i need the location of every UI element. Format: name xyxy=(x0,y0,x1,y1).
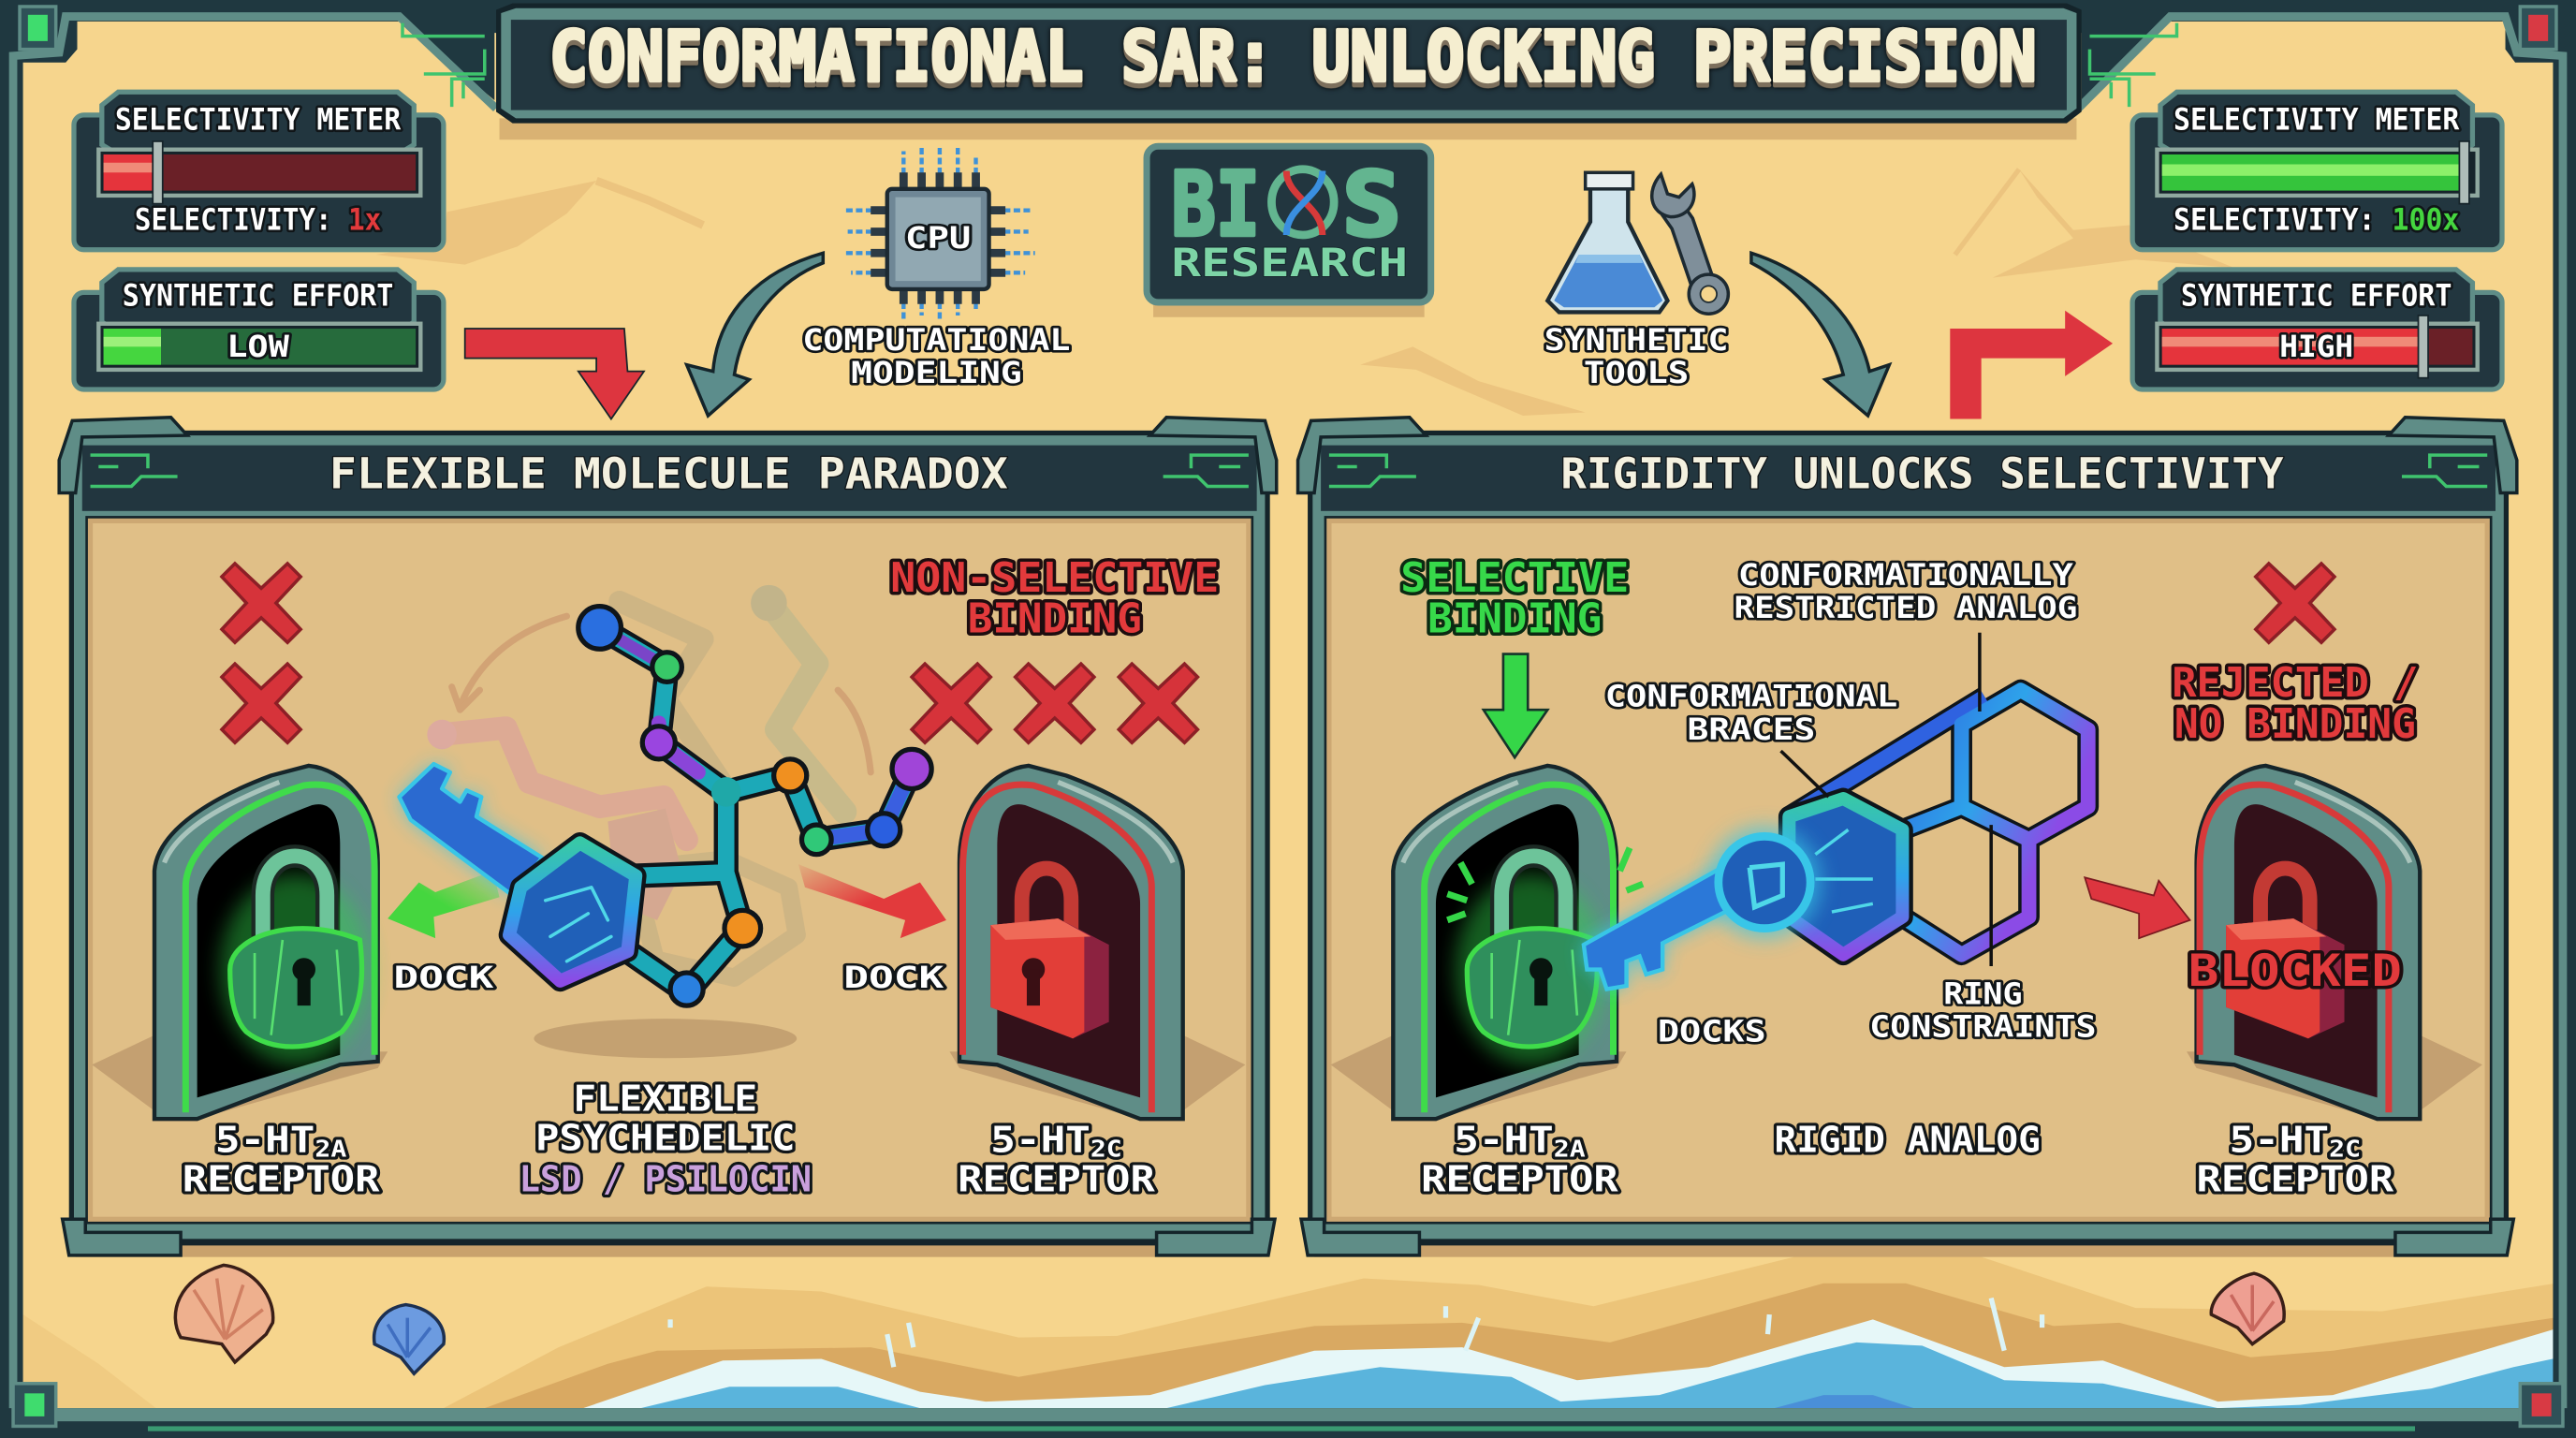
label: selective binding xyxy=(1400,554,1629,643)
panel heading: FLEXIBLE MOLECULE PARADOX xyxy=(329,448,1008,498)
label: 5-HT2C left: RECEPTOR xyxy=(958,1158,1156,1200)
label: 5-HT2C left xyxy=(958,1119,1156,1200)
label: conformational braces: CONFORMATIONAL xyxy=(1605,681,1897,714)
dune marks xyxy=(376,169,2234,416)
left synthetic effort xyxy=(74,270,444,389)
right selectivity meter xyxy=(2132,92,2502,250)
label: computational modeling: MODELING xyxy=(851,357,1022,390)
label: computational modeling: COMPUTATIONAL xyxy=(802,324,1070,358)
label: ring constraints: CONSTRAINTS xyxy=(1869,1010,2097,1044)
label: 5-HT2A right: 2A xyxy=(1554,1136,1586,1163)
label: rigid analog: RIGID ANALOG xyxy=(1775,1119,2041,1161)
label: 5-HT2A left: RECEPTOR xyxy=(183,1158,380,1200)
right synthetic effort: SYNTHETIC EFFORT xyxy=(2181,279,2452,313)
label: non-selective binding: NON-SELECTIVE xyxy=(890,554,1219,602)
title text: CONFORMATIONAL SAR: UNLOCKING PRECISION xyxy=(549,18,2036,97)
icon: CPU chip: CPU xyxy=(905,222,971,256)
left synthetic effort: SYNTHETIC EFFORT xyxy=(123,279,393,313)
label: 5-HT2C right xyxy=(2197,1119,2394,1200)
label: synthetic tools xyxy=(1544,324,1728,390)
label: conformationally restricted analog: CONFORMATIONALLY xyxy=(1738,559,2073,593)
arrow: green down xyxy=(1484,654,1547,757)
arrow: red high effort toward meter xyxy=(1950,311,2113,419)
label: 5-HT2C right: 2C xyxy=(2329,1136,2361,1163)
label: synthetic tools: SYNTHETIC xyxy=(1544,324,1728,358)
key: docking key xyxy=(1584,827,1821,990)
label: rejected no binding: REJECTED / xyxy=(2172,659,2419,707)
label: 5-HT2C right: 5-HT xyxy=(2230,1119,2317,1161)
label: 5-HT2A right: 5-HT xyxy=(1454,1119,1541,1161)
label: 5-HT2A left: 2A xyxy=(315,1136,347,1163)
logo: BIOS Research: S xyxy=(1342,154,1401,257)
shell: small blue xyxy=(374,1305,444,1373)
label: selective binding: SELECTIVE xyxy=(1400,554,1629,602)
label: non-selective binding xyxy=(890,554,1219,643)
arrow: synthetic tools into right panel xyxy=(1751,253,1889,416)
label: ring constraints: RING xyxy=(1943,977,2023,1011)
left selectivity meter: SELECTIVITY: 1x xyxy=(135,204,381,238)
label: non-selective binding: BINDING xyxy=(968,595,1142,643)
label: synthetic tools: TOOLS xyxy=(1584,357,1689,390)
label: docks: DOCKS xyxy=(1658,1016,1766,1049)
icon: red lock left xyxy=(990,869,1109,1038)
door: 5-HT2A open receptor right xyxy=(1331,766,1627,1119)
right selectivity meter: SELECTIVITY METER xyxy=(2174,104,2460,138)
label: conformationally restricted analog xyxy=(1734,559,2077,625)
label: computational modeling xyxy=(802,324,1070,390)
label: dock left: DOCK xyxy=(393,961,493,995)
right synthetic effort: HIGH xyxy=(2279,330,2353,364)
label: flexible psychedelic: LSD / PSILOCIN xyxy=(520,1158,812,1200)
door: 5-HT2C blocked receptor right xyxy=(2187,766,2482,1119)
door: 5-HT2C blocked receptor xyxy=(949,766,1245,1119)
panel: flexible molecule paradox xyxy=(59,418,1277,1257)
right selectivity meter: SELECTIVITY: 100x xyxy=(2174,204,2459,238)
label: selective binding: BINDING xyxy=(1427,595,1602,643)
label: 5-HT2A left xyxy=(183,1119,380,1200)
label: rejected no binding: NO BINDING xyxy=(2174,700,2416,748)
shell: large coral xyxy=(175,1265,273,1362)
label: ring constraints xyxy=(1869,977,2097,1044)
x marks above 5-HT2C xyxy=(912,664,1197,742)
arrow: red rejected xyxy=(2085,877,2190,938)
label: 5-HT2A left: 5-HT xyxy=(215,1119,302,1161)
door: 5-HT2A open receptor xyxy=(92,766,388,1119)
shell: right coral xyxy=(2211,1273,2284,1344)
x marks above 5-HT2A xyxy=(222,564,300,742)
panel heading: RIGIDITY UNLOCKS SELECTIVITY xyxy=(1560,448,2284,498)
arrow: green dock xyxy=(388,871,500,938)
label: 5-HT2A right: RECEPTOR xyxy=(1421,1158,1619,1200)
arrow: computational modeling into left panel xyxy=(687,253,823,416)
molecule: flexible ligand xyxy=(388,607,946,1005)
title banner xyxy=(496,4,2082,139)
callout lines xyxy=(1781,633,1991,966)
label: rejected no binding xyxy=(2172,659,2419,748)
left synthetic effort: LOW xyxy=(227,330,290,364)
icon: green lock right xyxy=(1447,848,1643,1064)
right synthetic effort xyxy=(2132,270,2502,389)
label: 5-HT2C right: RECEPTOR xyxy=(2197,1158,2394,1200)
label: flexible psychedelic: FLEXIBLE xyxy=(574,1078,757,1120)
molecule shadow xyxy=(534,1019,797,1058)
label: conformational braces: BRACES xyxy=(1687,713,1815,747)
ghost conformers and motion arrows xyxy=(427,585,871,977)
label: conformational braces xyxy=(1605,681,1897,747)
label: 5-HT2C left: 2C xyxy=(1090,1136,1122,1163)
left selectivity meter: SELECTIVITY METER xyxy=(115,104,402,138)
panel: rigidity unlocks selectivity xyxy=(1298,418,2517,1257)
molecule: rigid analog xyxy=(1789,690,2088,955)
left selectivity meter xyxy=(74,92,444,250)
label: flexible psychedelic: PSYCHEDELIC xyxy=(535,1118,795,1160)
arrow: red low effort into left panel xyxy=(465,329,644,419)
x mark: rejected xyxy=(2256,564,2334,642)
beach and waves xyxy=(23,1254,2576,1408)
key: molecule key arm and ring xyxy=(399,764,636,981)
label: 5-HT2C left: 5-HT xyxy=(990,1119,1077,1161)
logo: BIOS Research: BI xyxy=(1171,154,1260,257)
icon: CPU chip xyxy=(844,144,1035,322)
label: conformationally restricted analog: RESTRICTED ANALOG xyxy=(1734,592,2077,625)
label: 5-HT2A right xyxy=(1421,1119,1619,1200)
label: blocked: BLOCKED xyxy=(2188,946,2402,997)
arrow: red dock xyxy=(798,864,946,938)
icon: red lock right xyxy=(2226,869,2345,1038)
label: flexible psychedelic xyxy=(520,1078,812,1200)
logo: BIOS Research: RESEARCH xyxy=(1171,240,1408,286)
label: dock right: DOCK xyxy=(843,961,944,995)
icon: flask and wrench xyxy=(1547,172,1728,314)
logo: BIOS Research xyxy=(1147,146,1431,317)
icon: green lock left xyxy=(220,856,372,1064)
